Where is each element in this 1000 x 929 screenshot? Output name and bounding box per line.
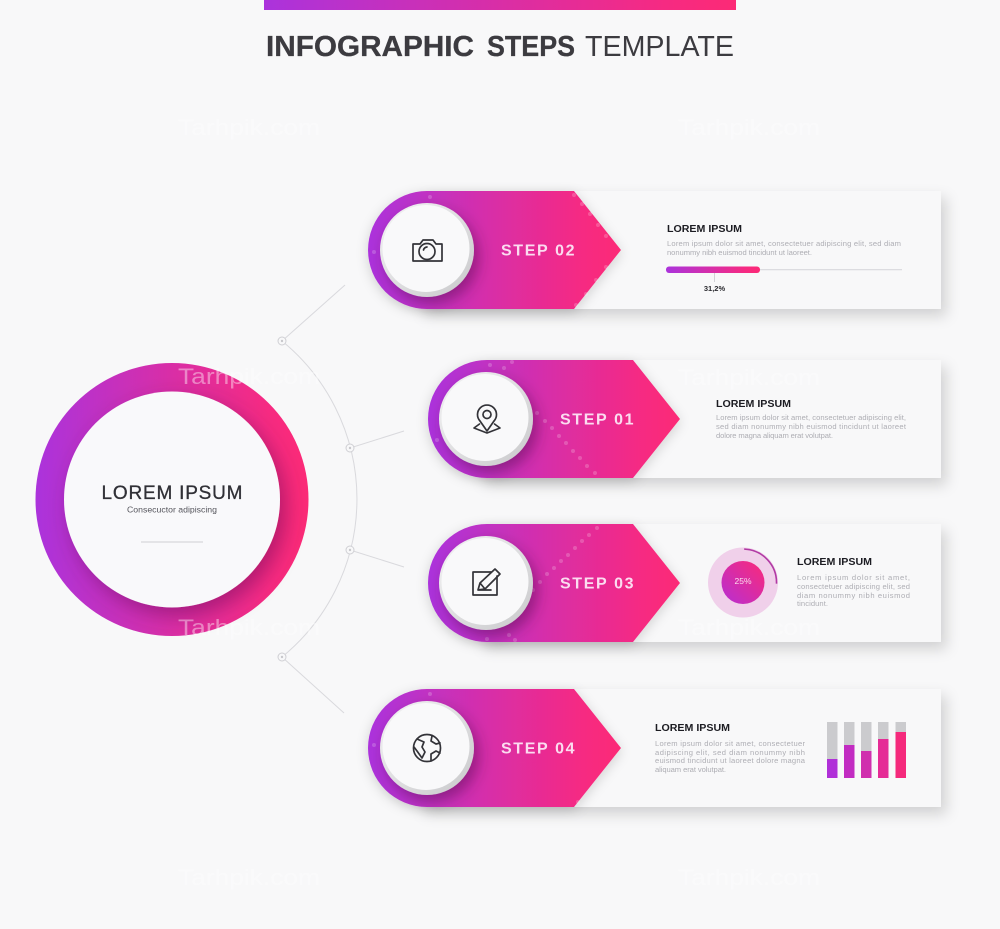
title: STEPS (487, 31, 575, 63)
watermarks: Tarhpik.com (178, 364, 320, 389)
body text: sed diam nonummy nibh euismod tincidunt ut laoreet (716, 422, 907, 431)
watermarks: Tarhpik.com (678, 615, 820, 640)
body text: dolore magna aliquam erat volutpat. (716, 431, 833, 440)
watermarks: Tarhpik.com (178, 115, 320, 140)
icon button: globe (380, 701, 474, 795)
panel: step 01 (428, 360, 941, 478)
body text: nonummy nibh euismod tincidunt ut laoreet. (667, 248, 812, 257)
icon button: map pin (439, 372, 533, 466)
watermarks: Tarhpik.com (678, 865, 820, 890)
heading: LOREM IPSUM (797, 556, 872, 568)
heading: LOREM IPSUM (655, 722, 730, 734)
panel: step 03 (428, 524, 941, 642)
panel: step 02 (368, 191, 941, 309)
label: step 04: STEP 04 (501, 740, 575, 758)
label: step 02: STEP 02 (501, 242, 575, 260)
watermarks: Tarhpik.com (178, 865, 320, 890)
icon button: pencil note (439, 536, 533, 630)
progress bar (666, 266, 902, 293)
title (266, 31, 734, 63)
heading: LOREM IPSUM (716, 398, 791, 410)
heading: LOREM IPSUM (667, 223, 742, 235)
top gradient bar (264, 0, 736, 10)
body text: Lorem ipsum dolor sit amet, consectetuer adipiscing elit, sed diam (667, 239, 901, 248)
body text: tincidunt. (797, 599, 828, 608)
watermarks: Tarhpik.com (178, 615, 320, 640)
donut chart 25% (708, 548, 778, 618)
body text (655, 739, 806, 774)
panel: step 04 (368, 689, 941, 807)
title: INFOGRAPHIC (266, 31, 474, 63)
body text: Lorem ipsum dolor sit amet, consectetuer (655, 739, 805, 748)
arrow: step 03 (428, 524, 680, 642)
body text: adipiscing elit, sed diam nonummy nibh (655, 748, 805, 757)
arrow: step 04 (368, 689, 621, 807)
progress bar: 31,2% (704, 284, 725, 293)
arrow: step 01 (428, 360, 680, 478)
bar chart (827, 722, 906, 778)
body text: euismod tincidunt ut laoreet dolore magna (655, 756, 806, 765)
body text (797, 573, 910, 608)
donut chart 25%: 25% (734, 576, 752, 586)
watermarks: Tarhpik.com (678, 365, 820, 390)
label: step 03: STEP 03 (560, 576, 634, 592)
connector arc with nodes (278, 285, 404, 713)
body text: Lorem ipsum dolor sit amet, (797, 573, 910, 582)
body text (716, 413, 907, 440)
central divider (141, 542, 203, 543)
icon button: camera (380, 203, 474, 297)
arrow: step 02 (368, 191, 621, 309)
central heading: LOREM IPSUM (102, 483, 242, 504)
body text (667, 239, 901, 257)
watermarks (178, 115, 820, 890)
watermarks: Tarhpik.com (678, 115, 820, 140)
body text: Lorem ipsum dolor sit amet, consectetuer adipiscing elit, (716, 413, 906, 422)
body text: diam nonummy nibh euismod (797, 591, 910, 600)
label: step 01: STEP 01 (560, 412, 634, 428)
body text: consectetuer adipiscing elit, sed (797, 582, 910, 591)
central circle (36, 363, 308, 636)
title: TEMPLATE (585, 31, 734, 63)
body text: aliquam erat volutpat. (655, 765, 726, 774)
central subheading: Consecuctor adipiscing (127, 504, 217, 514)
